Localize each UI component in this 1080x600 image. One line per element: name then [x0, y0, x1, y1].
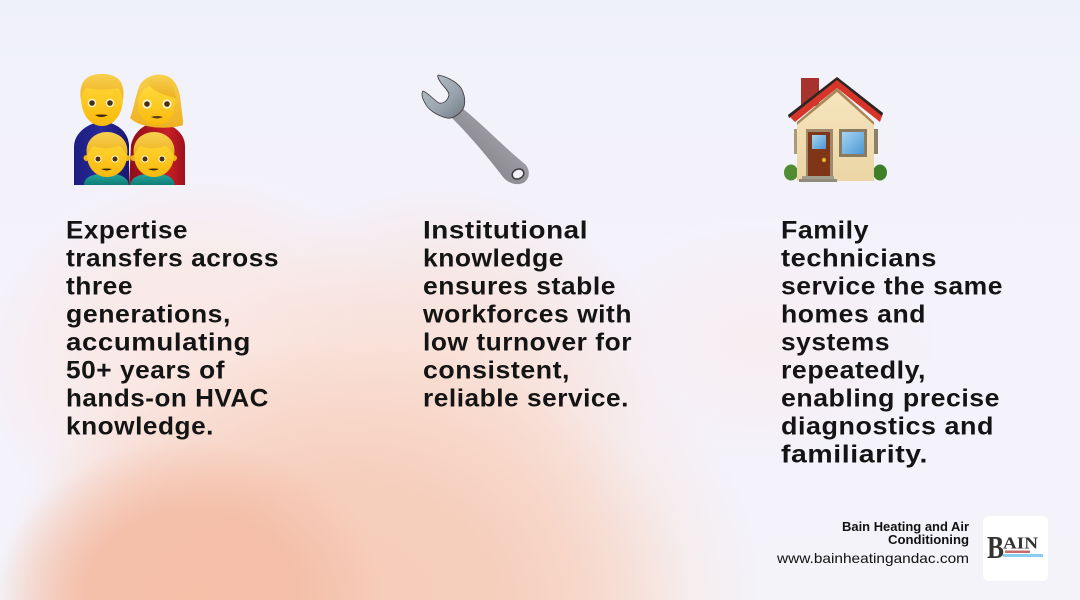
roof shadow	[797, 88, 874, 125]
text: family expertise: transfers across	[66, 244, 279, 272]
father body	[74, 122, 129, 185]
text: family technicians: repeatedly,	[781, 356, 926, 384]
roof shingle edge	[788, 77, 883, 118]
text: institutional knowledge: consistent,	[423, 356, 570, 384]
text: family technicians: technicians	[781, 244, 937, 272]
text: institutional knowledge: workforces with	[422, 300, 632, 328]
text: family technicians: diagnostics and	[781, 412, 994, 440]
roof	[788, 77, 883, 122]
text: family expertise: knowledge.	[66, 412, 214, 440]
logo card	[983, 516, 1048, 581]
icon: family of four	[74, 74, 185, 185]
brand text: www.bainheatingandac.com	[776, 550, 969, 566]
bushes	[784, 164, 798, 180]
text: institutional knowledge: low turnover for	[423, 328, 632, 356]
chimney	[801, 78, 819, 106]
mother body	[129, 122, 185, 185]
brand text	[776, 520, 969, 566]
text: institutional knowledge: knowledge	[423, 244, 564, 272]
handle	[452, 108, 529, 184]
brand text: Conditioning	[888, 533, 969, 547]
son right	[130, 173, 175, 185]
text: family technicians: enabling precise	[781, 384, 1000, 412]
text: family expertise: Expertise	[66, 216, 188, 244]
step	[802, 176, 834, 179]
text: family technicians: systems	[781, 328, 890, 356]
text: family technicians: Family	[781, 216, 869, 244]
door	[806, 129, 833, 176]
icon: house	[784, 77, 887, 182]
mother face	[138, 85, 175, 125]
text: family technicians: familiarity.	[781, 440, 928, 468]
text: family expertise: 50+ years of	[66, 356, 225, 384]
text: family expertise	[66, 216, 279, 440]
text: family expertise: three	[66, 272, 133, 300]
text: family technicians: service the same	[781, 272, 1003, 300]
side shutters	[794, 129, 798, 154]
father head	[81, 74, 123, 126]
window	[839, 129, 867, 157]
text: institutional knowledge: Institutional	[423, 216, 588, 244]
wall	[797, 88, 874, 181]
text: family expertise: hands-on HVAC	[66, 384, 269, 412]
text: family expertise: accumulating	[66, 328, 251, 356]
logo card: AIN	[1003, 534, 1039, 552]
text: family technicians	[781, 216, 1003, 468]
logo card: B	[987, 529, 1004, 565]
son left	[84, 173, 129, 185]
text: institutional knowledge	[422, 216, 632, 412]
text: institutional knowledge: reliable service.	[423, 384, 629, 412]
text: family expertise: generations,	[66, 300, 231, 328]
mother hair	[130, 75, 183, 128]
text: family technicians: homes and	[781, 300, 926, 328]
ring	[511, 167, 525, 181]
text: institutional knowledge: ensures stable	[423, 272, 616, 300]
brand text: Bain Heating and Air	[842, 520, 969, 534]
icon: wrench	[422, 75, 529, 184]
head	[422, 75, 465, 118]
